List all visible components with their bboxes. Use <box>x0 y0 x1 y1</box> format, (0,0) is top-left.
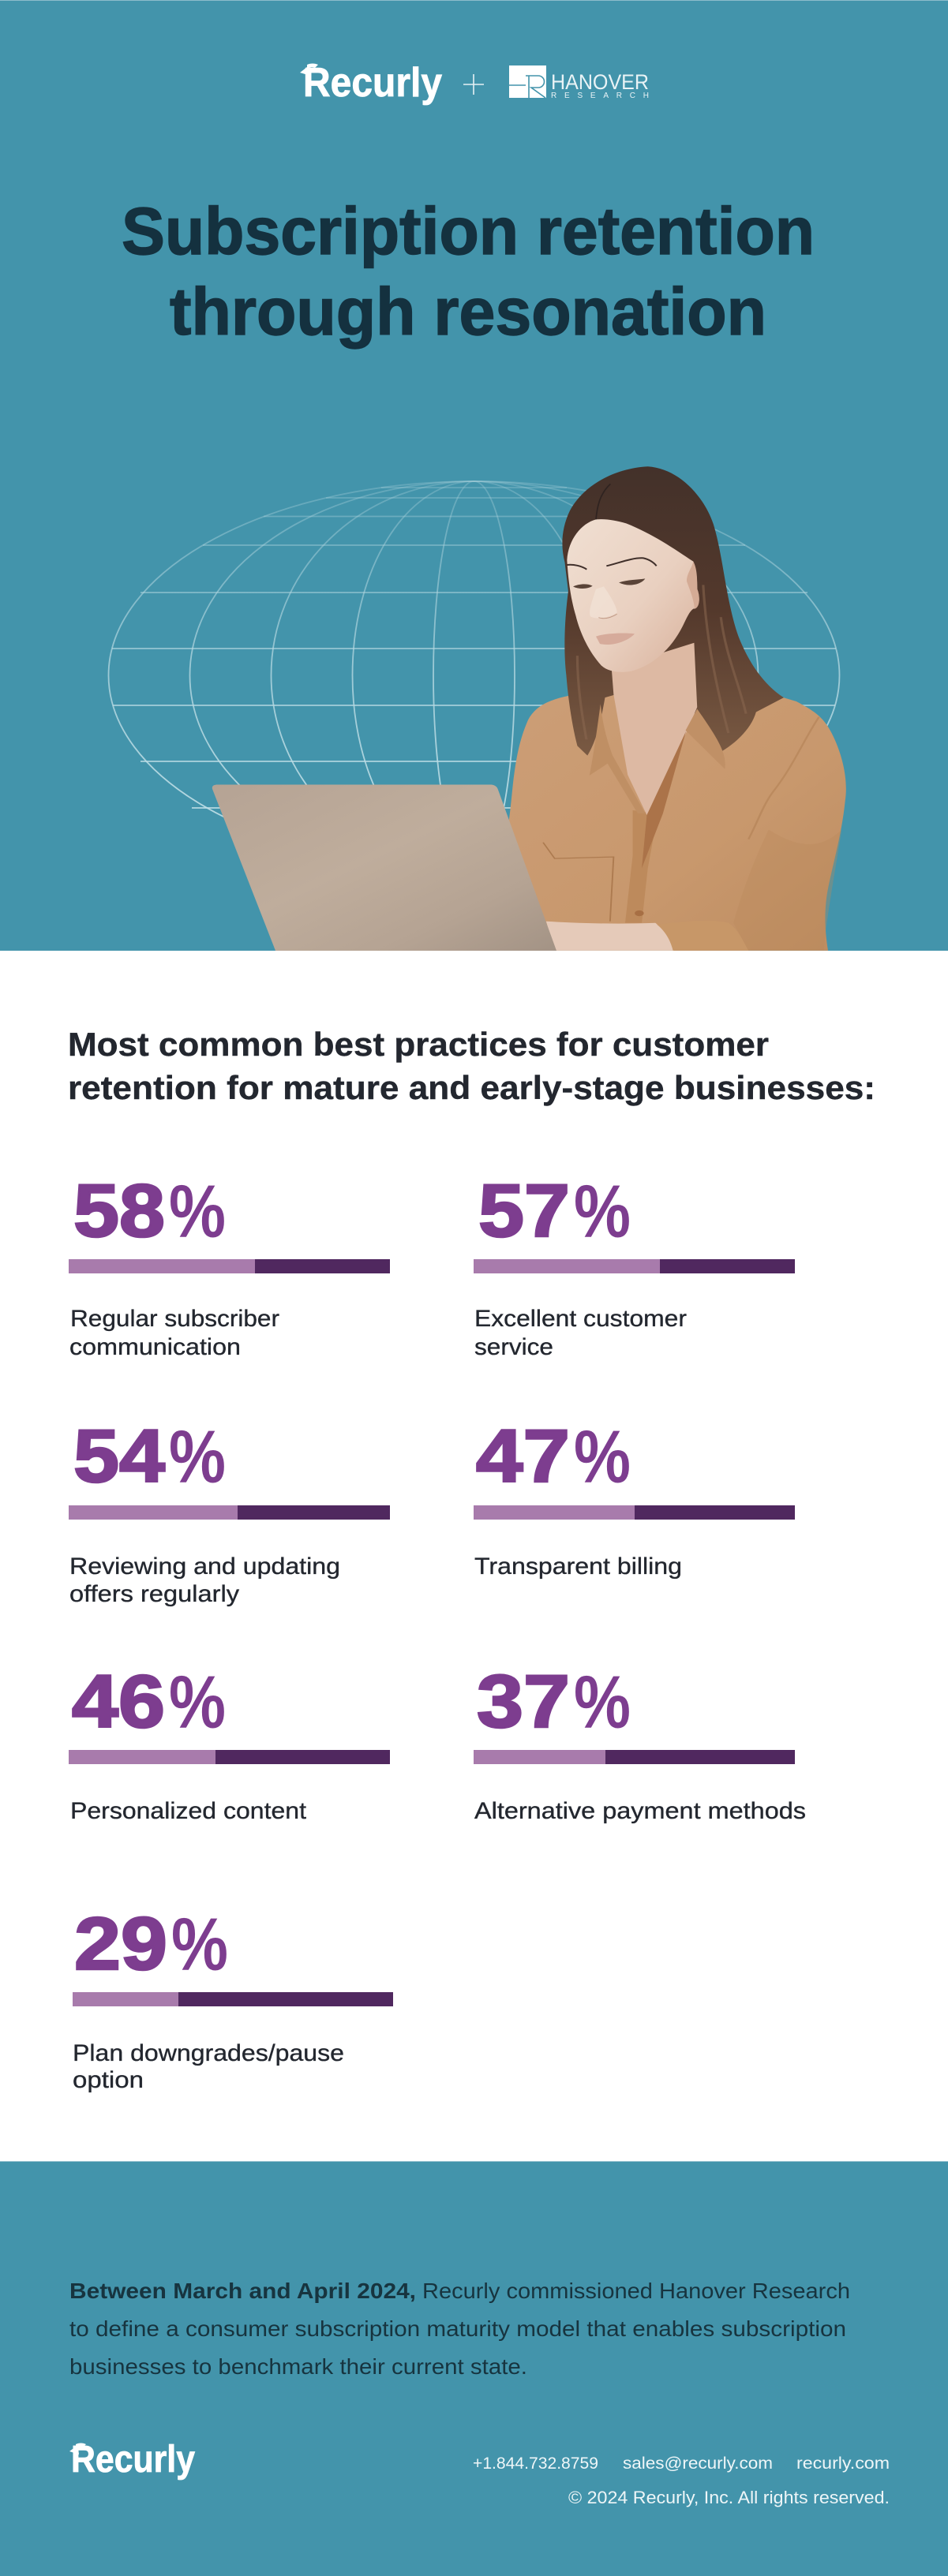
logo: Hanover Research: RESEARCH <box>551 92 649 100</box>
plus sign <box>463 74 484 95</box>
stat: 54% <box>69 1415 390 1607</box>
stat: 46%: 46 <box>72 1660 165 1744</box>
stat: 57%: service <box>474 1334 553 1360</box>
stat: 57%: Excellent customer <box>474 1306 687 1332</box>
panel: footer <box>0 2161 948 2576</box>
heading: best practices: Most common best practices for customer <box>68 1026 769 1063</box>
face <box>567 519 699 672</box>
hand <box>546 922 674 951</box>
contact details: +1.844.732.8759 <box>473 2454 598 2473</box>
about text: Between March and April 2024, <box>69 2279 416 2303</box>
about text: businesses to benchmark their current state. <box>69 2354 527 2379</box>
about text <box>69 2279 850 2379</box>
stat: 54%: offers regularly <box>69 1581 239 1607</box>
stat: 58%: Regular subscriber <box>70 1306 279 1332</box>
title <box>122 194 815 349</box>
hair <box>562 466 784 756</box>
stat: 47%: Transparent billing <box>474 1553 682 1580</box>
stat: 58%: 58 <box>73 1169 165 1253</box>
stat: 29%: Plan downgrades/pause <box>73 2040 344 2066</box>
copyright: © 2024 Recurly, Inc. All rights reserved. <box>568 2488 890 2507</box>
stat: 37%: Alternative payment methods <box>474 1798 806 1824</box>
stat: 29%: % <box>171 1903 228 1987</box>
nose shadow <box>590 586 617 618</box>
stat: 58% <box>69 1169 390 1360</box>
globe grid <box>109 481 840 869</box>
stat: 46% <box>69 1660 390 1824</box>
laptop <box>212 784 556 951</box>
about text: Recurly commissioned Hanover Research <box>422 2279 850 2303</box>
heading: best practices <box>68 1026 875 1106</box>
photo: woman using a laptop <box>212 466 846 951</box>
stat: 54%: Reviewing and updating <box>69 1553 340 1580</box>
stat: 37%: % <box>574 1661 631 1744</box>
stat: 37%: 37 <box>477 1660 570 1744</box>
stat: 46%: % <box>169 1661 226 1744</box>
stat: 47% <box>474 1415 795 1580</box>
logo: Recurly: Recurly <box>303 60 442 106</box>
neck and chest <box>612 643 697 815</box>
title: through resonation <box>170 275 766 349</box>
hair parting <box>596 484 610 519</box>
contact details <box>473 2454 890 2473</box>
stat: 54%: % <box>169 1415 226 1499</box>
heading: best practices: retention for mature and early-stage businesses: <box>68 1069 875 1106</box>
stat: 58%: communication <box>69 1334 241 1360</box>
collar <box>590 704 725 868</box>
panel: hero background <box>0 0 948 951</box>
stat: 37% <box>474 1660 806 1824</box>
stat: 47%: 47 <box>476 1415 570 1498</box>
eyebrows <box>567 558 657 570</box>
stat: 47%: % <box>574 1415 631 1499</box>
contact details: recurly.com <box>796 2454 890 2473</box>
stat: 57%: % <box>574 1170 631 1254</box>
eyes <box>573 578 645 589</box>
stat: 29%: option <box>73 2067 144 2093</box>
logo: Hanover Research: HANOVER <box>551 70 649 94</box>
lips <box>596 634 635 645</box>
logo: Hanover Research <box>509 65 649 100</box>
shirt <box>508 682 846 951</box>
title: Subscription retention <box>122 194 815 268</box>
stat: 29%: 29 <box>74 1902 167 1986</box>
stat: 54%: 54 <box>73 1415 165 1498</box>
right cuff <box>657 921 748 951</box>
stat: 46%: Personalized content <box>70 1798 307 1824</box>
about text: to define a consumer subscription maturity model that enables subscription <box>69 2316 846 2341</box>
stat: 29% <box>73 1902 393 2093</box>
stat: 58%: % <box>169 1170 226 1254</box>
logo lockup: Recurly + Hanover Research <box>300 60 649 106</box>
stat: 57%: 57 <box>478 1169 570 1253</box>
stat: 57% <box>474 1169 795 1360</box>
logo: Recurly footer: Recurly <box>71 2439 195 2481</box>
contact details: sales@recurly.com <box>623 2454 773 2473</box>
